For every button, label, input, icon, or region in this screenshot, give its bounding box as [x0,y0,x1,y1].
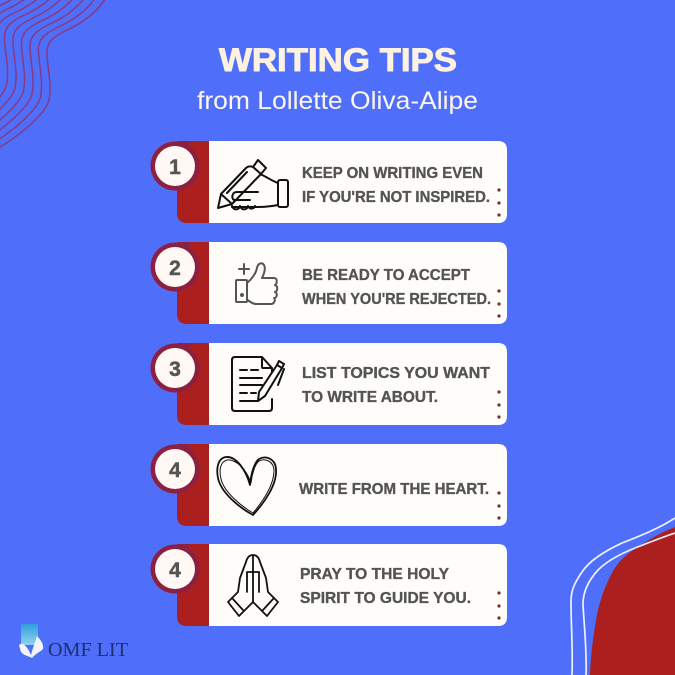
icon: hand writing with pencil [218,160,288,209]
text: tip 1: IF YOU'RE NOT INSPIRED. [302,189,490,206]
card: tip 5 prayer [209,544,507,626]
number badge 4 [150,444,200,494]
number badge 2 [150,242,200,292]
subtitle: from Lollette Oliva-Alipe [197,87,478,115]
decoration: white curves bottom right [571,518,675,675]
text: tip 5 prayer: SPIRIT TO GUIDE YOU. [300,590,471,607]
text: tip 4 heart: WRITE FROM THE HEART. [299,481,489,498]
dots: tip 2 [497,289,501,318]
number badge 3: 3 [169,358,181,381]
number badge 3 [150,343,200,392]
text: tip 3 [302,365,490,406]
icon: thumbs up [236,263,277,304]
icon: praying hands [228,555,278,616]
tab: tip 1 [177,141,210,223]
title: WRITING TIPS [219,42,457,78]
text: tip 2: BE READY TO ACCEPT [302,267,470,284]
text: tip 1: KEEP ON WRITING EVEN [302,165,483,182]
card: tip 2 [209,242,507,324]
number badge 1 [150,141,200,190]
logo mark: book and leaf [19,624,43,658]
card: tip 1 [209,141,507,223]
text: tip 5 prayer [300,566,471,607]
icon: heart [217,457,276,515]
text: tip 3: LIST TOPICS YOU WANT [302,365,490,382]
dots: tip 1 [497,188,501,217]
text: tip 2 [302,267,491,308]
tab: tip 5 prayer [177,544,210,626]
panel: tip 4 heart [150,444,507,526]
text: tip 1 [302,165,490,206]
tab: tip 2 [177,242,210,324]
panel: tip 1 [150,141,507,223]
panel: tip 3 [150,343,507,425]
text: tip 5 prayer: PRAY TO THE HOLY [300,566,449,583]
logo wordmark: OMF LIT [48,639,128,661]
dots: tip 3 [497,390,501,419]
number badge 4 second: 4 [169,559,181,582]
panel: tip 5 prayer [150,544,507,626]
icon: document and pen [232,357,284,411]
text: tip 2: WHEN YOU'RE REJECTED. [302,291,491,308]
decoration: wavy lines top left [0,0,125,200]
dots: tip 4 heart [497,491,501,520]
tab: tip 4 heart [177,444,210,526]
dots: tip 5 prayer [497,591,501,620]
panel: tip 2 [150,242,507,324]
number badge 4: 4 [169,459,181,482]
card: tip 3 [209,343,507,425]
number badge 2: 2 [169,257,181,280]
card: tip 4 heart [209,444,507,526]
tab: tip 3 [177,343,210,425]
logo: OMF LIT [19,624,128,661]
text: tip 3: TO WRITE ABOUT. [302,389,438,406]
decoration: red blob bottom right [590,527,675,675]
number badge 1: 1 [169,156,181,179]
number badge 4 second [150,544,200,594]
